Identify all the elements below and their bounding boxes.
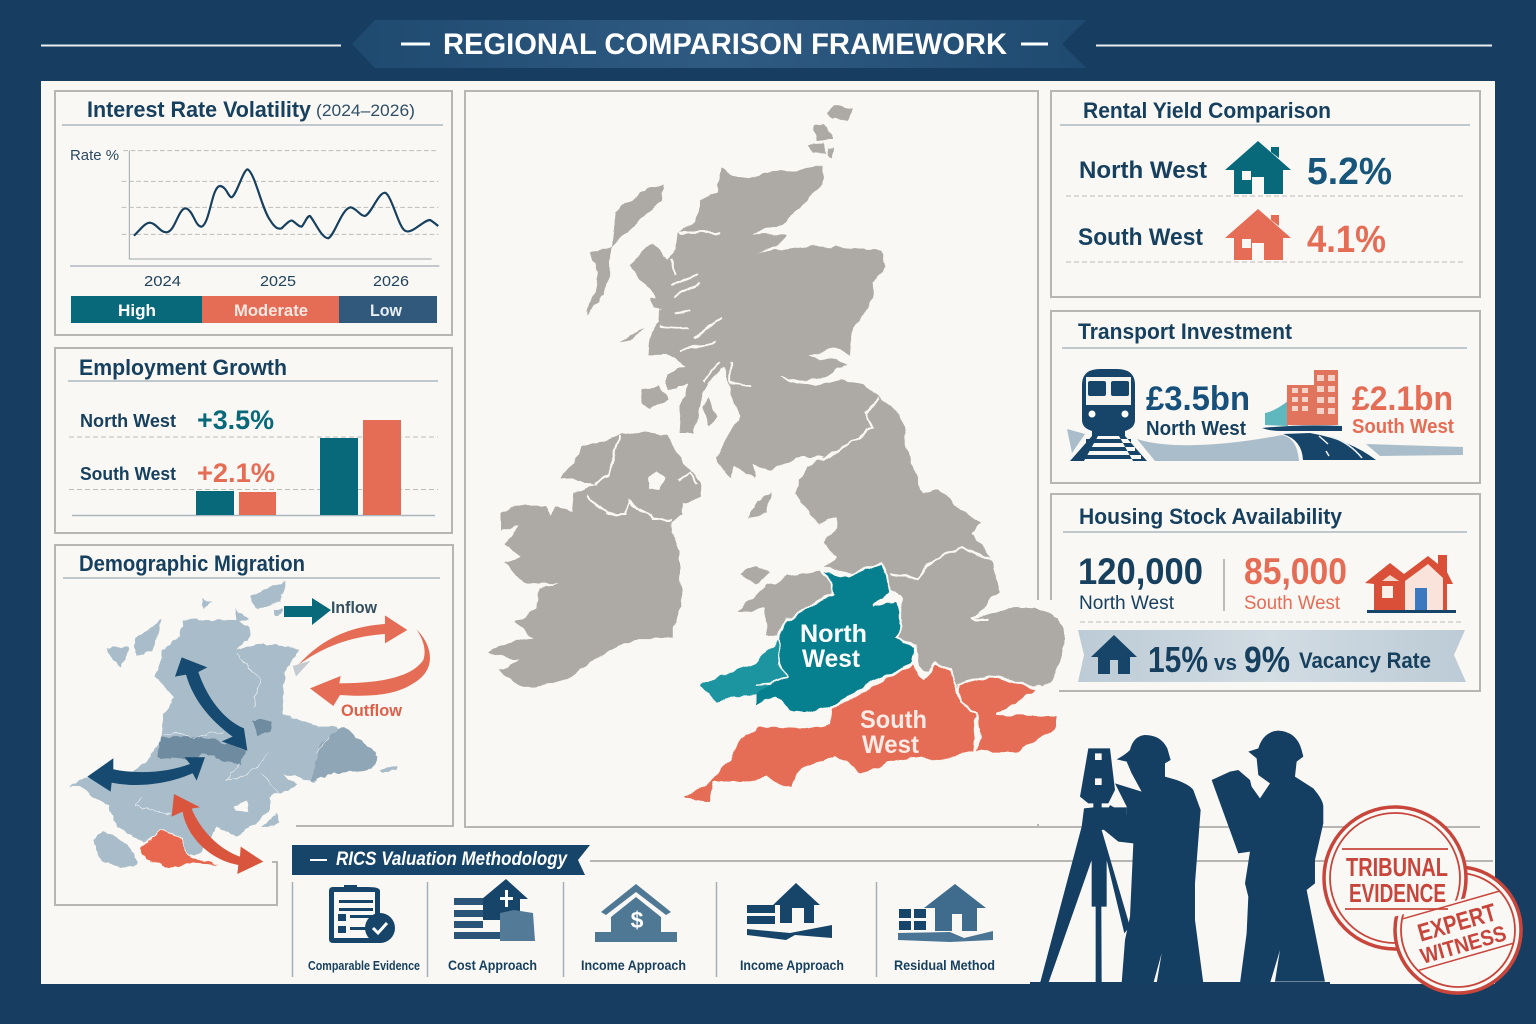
- icon: train: [1070, 369, 1147, 461]
- panel: demographic migration: [55, 545, 453, 905]
- line chart: 2026: [373, 273, 409, 290]
- stamp: tribunal evidence: [1324, 807, 1521, 993]
- methodology dividers: [292, 882, 876, 977]
- value: south west transport: £2.1bn: [1352, 380, 1453, 418]
- value: south west transport: South West: [1352, 416, 1454, 438]
- north west growth: North West: [80, 411, 176, 431]
- value: north west stock: North West: [1079, 593, 1175, 614]
- icon: house and stack: [747, 883, 832, 940]
- Ireland: [490, 432, 702, 689]
- method: income approach: Income Approach: [581, 957, 686, 973]
- value: south west stock: 85,000: [1244, 551, 1347, 592]
- south west growth: +2.1%: [197, 458, 275, 488]
- north west growth: +3.5%: [197, 405, 274, 435]
- South East region: [958, 675, 1058, 753]
- label: south west: [860, 706, 927, 759]
- label: north west: West: [802, 645, 861, 673]
- silhouettes of surveyors: [1030, 731, 1330, 986]
- UK map: [490, 105, 1066, 803]
- value: south west stock: South West: [1244, 593, 1341, 614]
- method: residual method: [894, 884, 995, 973]
- method: cost approach: Cost Approach: [448, 957, 537, 973]
- method: income approach alternate: [740, 883, 844, 973]
- Isle of Man and Anglesey: [740, 493, 772, 584]
- vacancy ribbon: vs: [1214, 650, 1237, 675]
- panel: rental yield: [1051, 91, 1480, 297]
- label: north west: North: [800, 620, 867, 648]
- volatility legend: High: [118, 301, 156, 320]
- icon: buildings and road: [1262, 370, 1376, 460]
- value: south west stock: [1244, 551, 1347, 614]
- north west yield: [1079, 141, 1392, 194]
- stamp: expert witness: [1395, 867, 1521, 993]
- heading: interest rate: Interest Rate Volatility: [87, 97, 312, 122]
- panel: housing stock: [1051, 494, 1480, 691]
- north west yield: North West: [1079, 157, 1207, 184]
- icon: house and grid: [898, 884, 993, 942]
- south west yield: [1078, 209, 1386, 261]
- North Wales: [736, 572, 834, 636]
- white borders: [587, 400, 991, 620]
- method: comparable evidence: [308, 885, 420, 973]
- icon: clipboard: [329, 885, 395, 943]
- stamp text: expert witness: EXPERT: [1415, 899, 1499, 947]
- north west growth: [80, 405, 274, 435]
- south west growth: [80, 458, 275, 488]
- icon: houses: [1365, 555, 1456, 613]
- Great Britain: [629, 166, 1066, 695]
- value: north west transport: [1146, 380, 1250, 440]
- volatility legend: Low: [370, 301, 403, 320]
- surveyor with clipboard: [1212, 731, 1325, 983]
- surveyor with total station: [1040, 735, 1203, 983]
- panel: interest rate volatility: [55, 91, 452, 335]
- heading: demographic: Demographic Migration: [79, 551, 305, 576]
- arrows: regional migration: [87, 657, 263, 874]
- stamps: [1324, 807, 1521, 993]
- line chart: [70, 147, 439, 290]
- heading: rental: Rental Yield Comparison: [1083, 98, 1331, 123]
- arrow: inflow key: [284, 598, 331, 625]
- icon: dollar house: $: [631, 907, 644, 933]
- line chart: Rate %: [70, 147, 119, 164]
- label: outflow: Outflow: [341, 701, 403, 720]
- value: north west transport: £3.5bn: [1146, 380, 1250, 418]
- method: comparable evidence: Comparable Evidence: [308, 958, 420, 973]
- value: south west transport: [1352, 380, 1454, 438]
- method: income approach alternate: Income Approach: [740, 957, 844, 973]
- vacancy ribbon: Vacancy Rate: [1299, 648, 1431, 673]
- Scottish islands: [586, 105, 853, 425]
- vacancy ribbon: 15%: [1148, 639, 1208, 680]
- grey England south: [891, 551, 1066, 686]
- panel: transport investment: [1051, 311, 1480, 483]
- landscape ribbon: [1067, 429, 1463, 461]
- heading: employment: Employment Growth: [79, 355, 287, 380]
- line chart: 2024: [144, 273, 181, 290]
- value: north west transport: North West: [1146, 418, 1246, 440]
- value: north west stock: [1078, 551, 1203, 614]
- arrow: outflow loop: [293, 615, 430, 706]
- stamp: tribunal evidence: EVIDENCE: [1349, 878, 1446, 908]
- value: north west stock: 120,000: [1078, 551, 1203, 592]
- RICS methodology banner: [292, 845, 590, 875]
- panel: UK map: [465, 91, 1493, 861]
- south west yield: South West: [1078, 224, 1203, 251]
- line chart: 2025: [260, 273, 296, 290]
- panel: employment growth: [55, 348, 452, 533]
- RICS methodology banner: RICS Valuation Methodology: [336, 849, 568, 870]
- south west yield: 4.1%: [1307, 219, 1386, 261]
- south west growth: South West: [80, 464, 176, 484]
- North West region: [700, 564, 915, 714]
- stamp text: expert witness: WITNESS: [1417, 920, 1509, 969]
- stamp text: expert witness: [1403, 891, 1514, 971]
- title banner: [41, 20, 1492, 68]
- heading: interest rate: (2024–2026): [316, 101, 415, 120]
- label: inflow: Inflow: [331, 598, 378, 617]
- heading: interest rate: [62, 97, 443, 125]
- heading: housing: Housing Stock Availability: [1079, 504, 1343, 529]
- volatility legend: [71, 296, 437, 323]
- north west yield: 5.2%: [1307, 151, 1392, 193]
- method: residual method: Residual Method: [894, 957, 995, 973]
- title banner: REGIONAL COMPARISON FRAMEWORK: [443, 28, 1007, 61]
- heading: transport: Transport Investment: [1078, 319, 1293, 344]
- volatility legend: Moderate: [234, 301, 308, 320]
- South West region: [681, 663, 978, 803]
- method: income approach: [581, 884, 686, 973]
- bottom band: [1030, 982, 1330, 986]
- label: south west: West: [862, 731, 920, 759]
- bar chart: [196, 420, 401, 515]
- vacancy ribbon: [1078, 630, 1466, 682]
- vacancy ribbon: 9%: [1244, 639, 1290, 680]
- migration map: [70, 582, 397, 868]
- icon: building and hand: [454, 879, 535, 941]
- stamp: tribunal evidence: TRIBUNAL: [1346, 852, 1448, 882]
- label: north west: [800, 620, 867, 673]
- sea lochs: [652, 232, 752, 395]
- method: cost approach: [448, 879, 537, 973]
- label: south west: South: [860, 706, 927, 734]
